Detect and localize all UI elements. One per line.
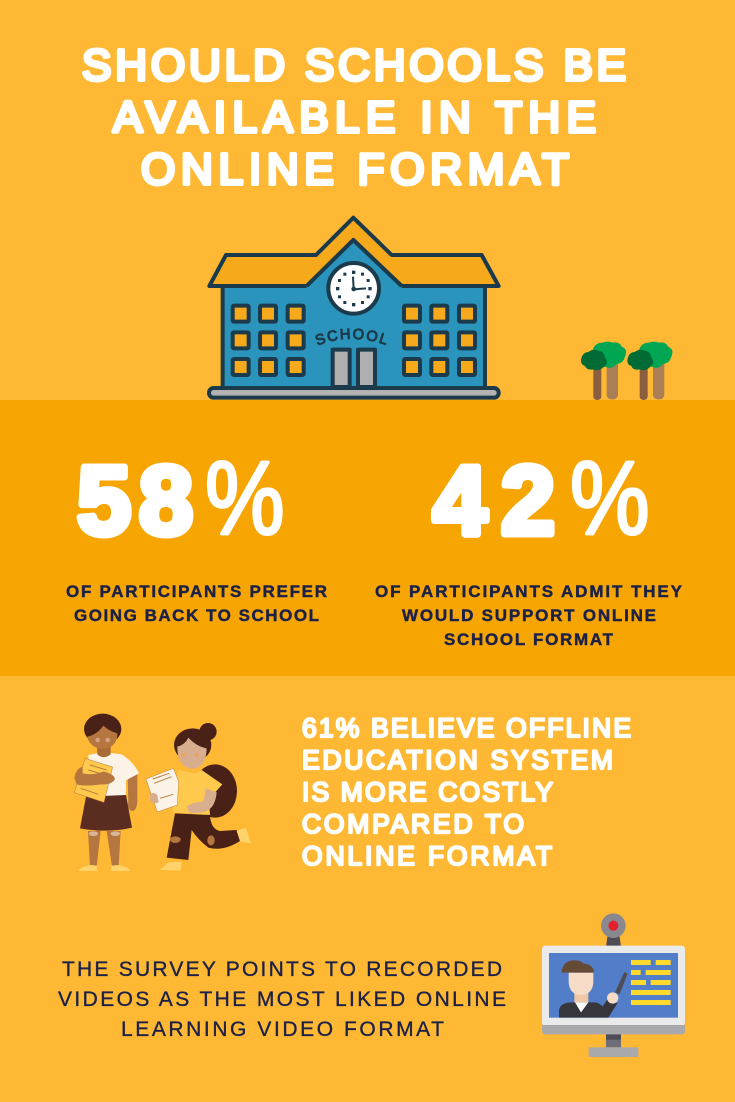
stat: 42 percent: 4 [433,446,487,555]
title [82,41,626,194]
stat: 42 percent [433,440,650,557]
text: prefer going back: GOING BACK TO SCHOOL [74,606,319,625]
text: 61 percent believe [302,713,631,871]
text: survey recorded videos [58,958,506,1041]
text: prefer going back [66,582,327,625]
icon: school building: SCHOOL [315,328,386,346]
student two [146,723,251,871]
stat: 42 percent: 2 [501,446,555,555]
stat: 58 percent [77,440,285,557]
panel: statistics band [0,400,735,676]
title: SHOULD SCHOOLS BE [82,41,626,90]
title: ONLINE FORMAT [141,145,569,194]
text: survey recorded videos: VIDEOS AS THE MOST LIKED ONLINE [58,988,506,1011]
text: support online: OF PARTICIPANTS ADMIT THEY [375,582,683,601]
illustration: two students [74,714,251,871]
text: 61 percent believe: IS MORE COSTLY [302,777,553,807]
text: support online [375,582,683,649]
text: 61 percent believe: COMPARED TO [302,809,524,839]
text: support online: SCHOOL FORMAT [444,630,614,649]
icon: trees [581,342,672,400]
text: 61 percent believe: 61% BELIEVE OFFLINE [302,713,631,743]
icon: school building [207,216,501,400]
text: prefer going back: OF PARTICIPANTS PREFER [66,582,327,601]
stat: 42 percent: % [570,440,650,557]
text: support online: WOULD SUPPORT ONLINE [402,606,656,625]
stat: 58 percent: 5 [77,446,131,555]
icon: computer with online teacher [542,913,685,1057]
student one [74,714,139,871]
stat: 58 percent: 8 [139,446,193,555]
title: AVAILABLE IN THE [113,93,596,142]
stat: 58 percent: % [205,440,285,557]
text: survey recorded videos: THE SURVEY POINTS TO RECORDED [62,958,502,981]
text: 61 percent believe: ONLINE FORMAT [302,841,552,871]
text: survey recorded videos: LEARNING VIDEO FORMAT [121,1018,444,1041]
text: 61 percent believe: EDUCATION SYSTEM [302,745,613,775]
